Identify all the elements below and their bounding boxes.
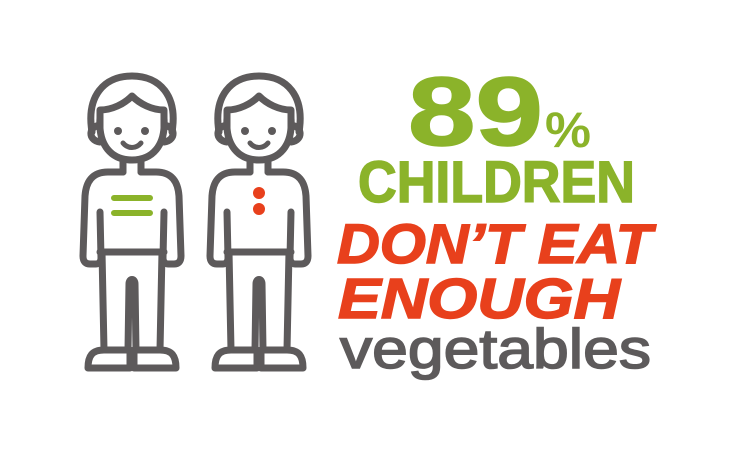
heading: 89%: 89 — [408, 57, 543, 166]
percent sign: % — [545, 102, 591, 158]
text: DON'T EAT: DON’T EAT — [337, 212, 657, 275]
figure: girl — [210, 76, 308, 368]
text: ENOUGH: ENOUGH — [338, 267, 622, 331]
icon: red buttons — [253, 187, 265, 215]
figure: boy — [83, 76, 181, 368]
text: CHILDREN: CHILDREN — [358, 150, 635, 215]
text: vegetables: vegetables — [340, 317, 651, 380]
icon: green stripes — [114, 198, 150, 213]
